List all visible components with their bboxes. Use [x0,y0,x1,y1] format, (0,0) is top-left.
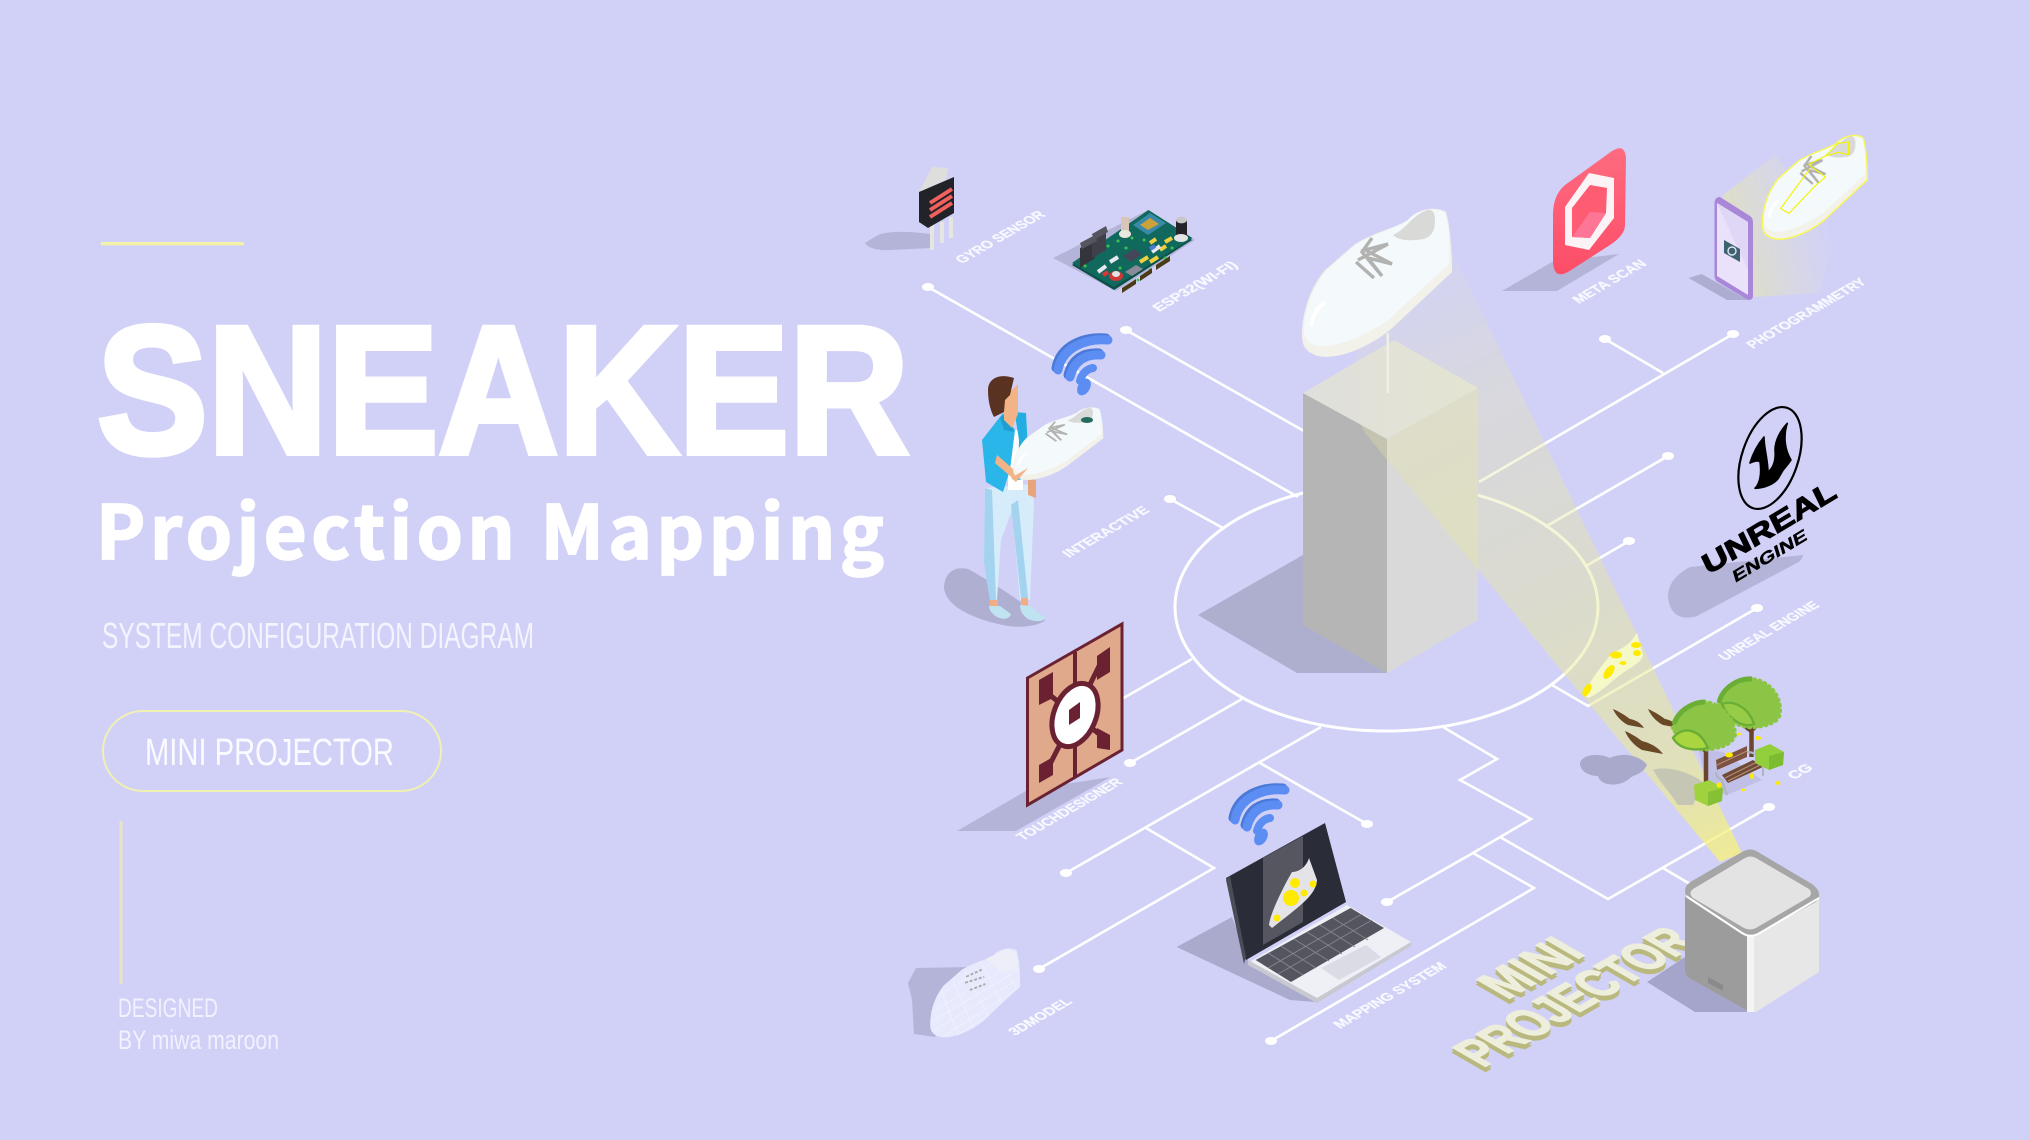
cg scene: birds and park [1580,679,1784,806]
caption: system configuration diagram: SYSTEM CONFIGURATION DIAGRAM [102,615,534,656]
connector: upper right branch [1545,452,1674,527]
title: SNEAKER: SNEAKER [97,288,909,492]
connector: touchdesigner lower [1124,699,1242,767]
infographic canvas [98,134,1868,1072]
platform circle [1175,483,1598,731]
pill badge: mini projector: MINI PROJECTOR [145,732,394,774]
3d lettering: mini projector: MINI [1464,931,1597,1009]
icon: touchdesigner [957,624,1122,831]
label: 3d model: 3DMODEL [1005,996,1076,1038]
label: unreal engine: UNREAL ENGINE [1715,599,1823,663]
tree shadow inside beam [1653,768,1703,805]
tree trunks [1706,722,1752,782]
designer credit: DESIGNED [118,993,218,1023]
figure holding sneaker [944,376,1103,627]
title block [96,242,909,1055]
designer credit [118,993,279,1055]
ground shadows [1580,755,1647,785]
icon: wifi signal near figure [1056,338,1108,398]
icon: photogrammetry phone and sneaker [1689,136,1867,300]
3d lettering: mini projector: MINI [1464,934,1597,1011]
icon: esp32 board [1053,210,1195,293]
label: gyro sensor: GYRO SENSOR [952,209,1049,266]
label: touchdesigner: TOUCHDESIGNER [1013,776,1126,843]
connector: laptop and mapping system [1265,727,1534,1045]
display pillar top [1303,340,1478,439]
label: meta scan: META SCAN [1569,258,1650,306]
connector: interactive [1164,495,1223,528]
pill badge: mini projector [103,711,441,791]
connector: gyro sensor [922,283,1298,497]
connector lines [922,283,1775,1045]
designer credit: BY miwa maroon [118,1025,279,1055]
label: interactive: INTERACTIVE [1059,504,1153,560]
3d lettering: mini projector: PROJECTOR [1440,921,1709,1077]
connector: unreal engine [1552,604,1763,706]
icon: wifi signal above laptop [1233,788,1285,848]
subtitle: Projection Mapping: Projection Mapping [96,474,884,581]
label: esp32: ESP32(WI-FI) [1149,259,1242,314]
connector: middle right branch [1586,537,1635,566]
3d lettering: mini projector: PROJECTOR [1440,923,1709,1079]
pillar support rod [1386,333,1389,393]
icon: meta scan [1502,148,1626,291]
connector: touchdesigner upper [1120,659,1192,700]
bush front [1694,780,1723,806]
big sneaker [1302,209,1452,357]
birds [1613,709,1679,754]
bench shadow [1698,748,1762,795]
label: cg: CG [1784,762,1817,782]
label: mapping system: MAPPING SYSTEM [1330,960,1450,1031]
connector: cg to projector [1500,803,1775,899]
vertical accent line [120,821,122,984]
yellow sparks [1717,733,1780,791]
mini projector cube [1647,850,1819,1012]
icon: laptop with mapping system [1177,823,1411,1003]
3d lettering: mini projector: MINI [1464,929,1597,1006]
label: photogrammetry: PHOTOGRAMMETRY [1743,276,1870,351]
connector: 3d model and wifi branch [1033,727,1373,973]
pillar shadow [1198,555,1387,673]
display pillar body [1303,388,1478,673]
connector: esp32 [1120,326,1304,431]
projection beam [1345,250,1742,862]
tree canopies [1719,679,1780,727]
logo: unreal engine: ENGINE [1731,525,1809,586]
3d lettering: mini projector [1440,918,1709,1079]
accent line [101,242,244,245]
icon: 3d model sneaker [908,948,1022,1038]
3d lettering: mini projector: PROJECTOR [1440,918,1709,1074]
icon: gyro sensor [865,167,954,250]
logo: unreal engine [1668,399,1841,618]
connector: photogrammetry and meta scan [1479,330,1739,482]
bench [1716,746,1763,795]
bush back [1755,744,1784,770]
projected sneaker on floor [1580,633,1643,698]
logo: unreal engine: UNREAL [1698,475,1841,581]
